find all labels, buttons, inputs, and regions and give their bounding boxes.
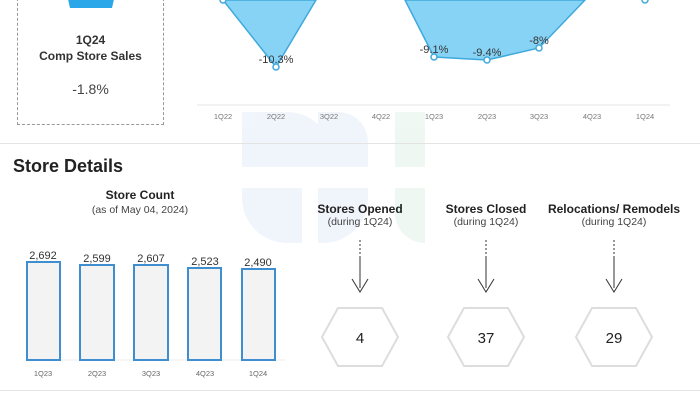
- hexagon value: 29: [606, 330, 622, 347]
- stat: relocations/remodels: (during 1Q24): [582, 216, 646, 228]
- store count title: (as of May 04, 2024): [92, 204, 188, 216]
- KPI card: comp store sales: [17, 0, 164, 125]
- card label: 1Q24: [76, 33, 105, 47]
- area chart: comp sales trend: -8%: [529, 35, 549, 47]
- card label: Comp Store Sales: [39, 49, 142, 63]
- stat: stores opened: Stores Opened: [317, 202, 403, 216]
- bar chart: store count: 1Q23: [34, 369, 52, 378]
- area chart: comp sales trend: 1Q22: [214, 112, 232, 121]
- arrow: [606, 240, 622, 293]
- store count title: Store Count: [106, 188, 174, 202]
- bar chart: store count: 2,607: [137, 253, 165, 265]
- arrow: [352, 240, 368, 293]
- hexagon value: 4: [356, 330, 364, 347]
- store count title: [92, 188, 188, 216]
- bar chart: store count: 4Q23: [196, 369, 214, 378]
- area chart: comp sales trend: 3Q23: [530, 112, 548, 121]
- area chart: comp sales trend: [197, 0, 670, 121]
- hexagon value: 37: [478, 330, 494, 347]
- heading: Store Details: Store Details: [13, 156, 123, 176]
- area chart: comp sales trend: 3Q22: [320, 112, 338, 121]
- bar chart: store count: 2Q23: [88, 369, 106, 378]
- icon stub: [68, 0, 114, 8]
- area chart: comp sales trend: 4Q23: [583, 112, 601, 121]
- area chart: comp sales trend: -9.1%: [420, 44, 449, 56]
- stat: stores closed: Stores Closed: [446, 202, 526, 216]
- stat: stores closed: (during 1Q24): [454, 216, 518, 228]
- area chart: comp sales trend: 2Q23: [478, 112, 496, 121]
- stat: stores closed: [446, 202, 526, 367]
- arrow: [478, 240, 494, 293]
- bar chart: store count: 2,490: [244, 257, 272, 269]
- bar chart: store count: 2,523: [191, 256, 219, 268]
- hexagon value: [447, 307, 525, 367]
- hexagon value: [321, 307, 399, 367]
- stat: relocations/remodels: [548, 202, 680, 367]
- area chart: comp sales trend: -10.3%: [259, 54, 294, 66]
- bar chart: store count: 2,599: [83, 253, 111, 265]
- stat: stores opened: [317, 202, 403, 367]
- stat: relocations/remodels: Relocations/ Remodels: [548, 202, 680, 216]
- area chart: comp sales trend: 4Q22: [372, 112, 390, 121]
- card value: -1.8%: [72, 81, 109, 97]
- area chart: comp sales trend: 2Q22: [267, 112, 285, 121]
- area chart: comp sales trend: -9.4%: [473, 47, 502, 59]
- card label: [39, 33, 142, 63]
- bar chart: store count: 3Q23: [142, 369, 160, 378]
- bar chart: store count: [25, 250, 285, 378]
- hexagon value: [575, 307, 653, 367]
- stat: stores opened: (during 1Q24): [328, 216, 392, 228]
- area chart: comp sales trend: 1Q23: [425, 112, 443, 121]
- bar chart: store count: 2,692: [29, 250, 57, 262]
- bar chart: store count: 1Q24: [249, 369, 267, 378]
- area chart: comp sales trend: 1Q24: [636, 112, 654, 121]
